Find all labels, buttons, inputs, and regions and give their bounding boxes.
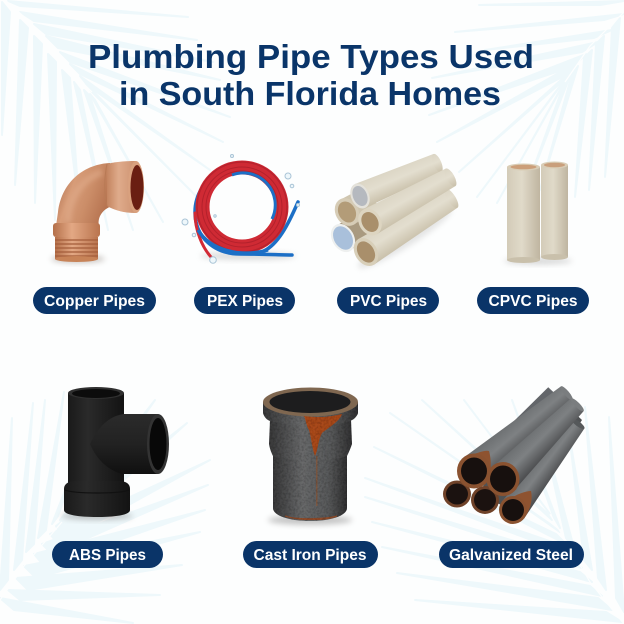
middle pipe bbox=[354, 163, 461, 240]
panel: ABS pipes bbox=[52, 387, 169, 568]
rust collars bbox=[470, 451, 532, 517]
dark fill between pipes bbox=[472, 388, 582, 514]
label: PVC pipes bbox=[337, 287, 439, 314]
panel: copper pipes bbox=[33, 161, 156, 314]
icon: stack of PVC pipes bbox=[326, 150, 463, 275]
cast iron body bbox=[263, 402, 358, 521]
rust streak bbox=[285, 414, 342, 520]
title bbox=[88, 39, 534, 113]
top pipe bbox=[347, 150, 446, 211]
front openings bbox=[457, 454, 527, 524]
panel: CPVC pipes bbox=[477, 162, 589, 314]
bottom pipe bbox=[349, 184, 463, 271]
label: cast iron pipes bbox=[243, 541, 378, 568]
panel: PEX pipes bbox=[182, 154, 300, 314]
lower middle opening bbox=[471, 486, 499, 514]
lower-left blue pipe bbox=[326, 210, 376, 256]
icon: bundle of rusted galvanized pipes bbox=[443, 379, 591, 524]
icon: coiled PEX tubing bbox=[182, 154, 300, 263]
lower right pipe bbox=[502, 413, 591, 518]
label: ABS pipes: ABS Pipes bbox=[69, 547, 146, 564]
label: CPVC pipes: CPVC Pipes bbox=[488, 293, 578, 310]
lower left opening bbox=[443, 480, 471, 508]
title: in South Florida Homes bbox=[119, 76, 501, 113]
rear pipe bbox=[472, 384, 561, 478]
upper-left tan pipe bbox=[330, 185, 380, 230]
icon: rusted cast iron pipe bbox=[263, 388, 358, 525]
icon: black ABS tee fitting bbox=[61, 387, 169, 520]
label: copper pipes: Copper Pipes bbox=[44, 293, 145, 310]
label: ABS pipes bbox=[52, 541, 163, 568]
label: galvanized steel bbox=[439, 541, 584, 568]
label: PVC pipes: PVC Pipes bbox=[350, 293, 427, 310]
label: CPVC pipes bbox=[477, 287, 589, 314]
label: cast iron pipes: Cast Iron Pipes bbox=[254, 547, 366, 564]
upper right pipe bbox=[492, 392, 590, 490]
title: Plumbing Pipe Types Used bbox=[88, 39, 534, 76]
upper left pipe bbox=[463, 379, 580, 484]
icon: copper elbow fitting bbox=[51, 161, 144, 263]
panel: PVC pipes bbox=[326, 150, 463, 314]
panel: galvanized steel bbox=[439, 379, 591, 568]
label: galvanized steel: Galvanized Steel bbox=[449, 547, 573, 564]
label: PEX pipes bbox=[194, 287, 295, 314]
icon: two upright CPVC pipes bbox=[504, 162, 572, 264]
label: copper pipes bbox=[33, 287, 156, 314]
panel: cast iron pipes bbox=[243, 388, 378, 568]
label: PEX pipes: PEX Pipes bbox=[207, 293, 283, 310]
